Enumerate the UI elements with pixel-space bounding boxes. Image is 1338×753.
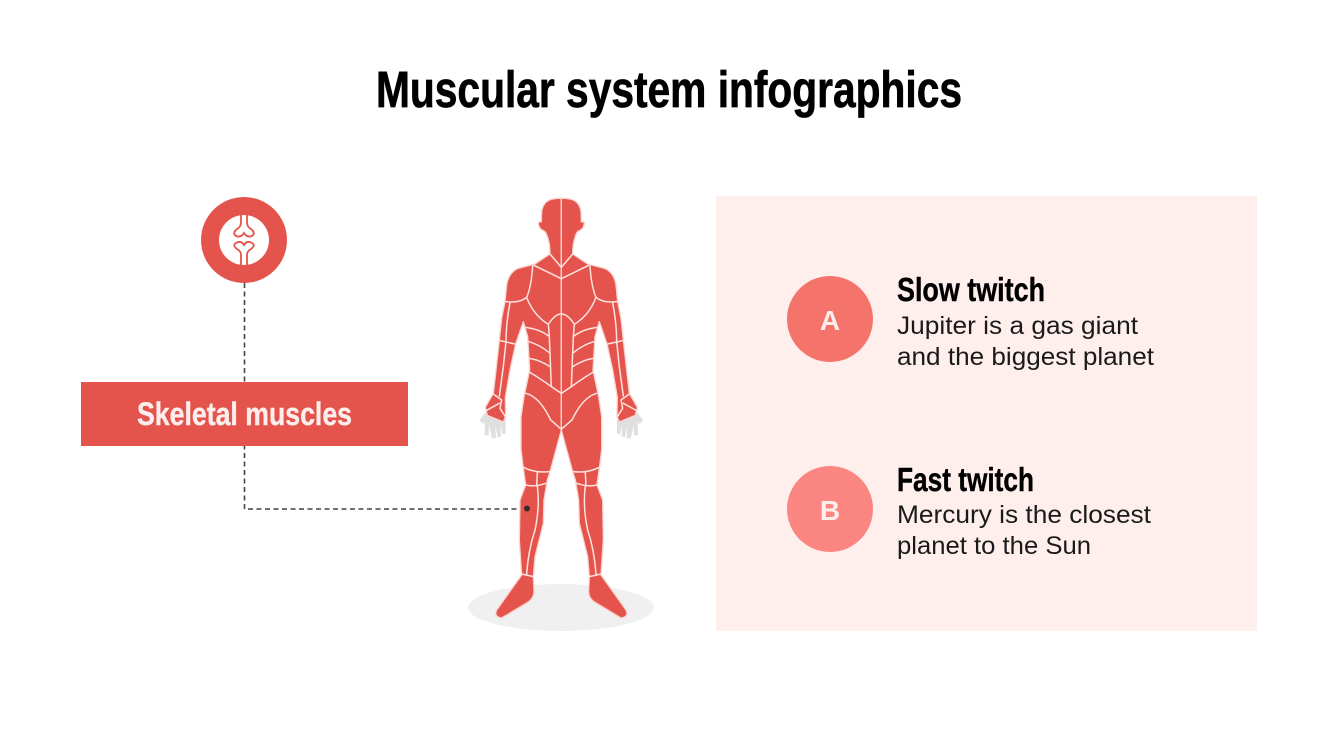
icon: joint [201,197,287,283]
item: fast twitch: B [820,495,840,526]
human muscular figure [479,198,643,618]
item: slow twitch [787,271,1154,371]
item: slow twitch: and the biggest planet [897,343,1154,371]
ground shadow [468,584,654,631]
title: Muscular system infographics [376,61,962,118]
item: fast twitch: planet to the Sun [897,532,1091,560]
item: slow twitch: Slow twitch [897,271,1045,308]
marker dot [524,506,530,512]
item: slow twitch: A [820,305,840,336]
label: skeletal muscles: Skeletal muscles [137,396,352,432]
item: fast twitch: Mercury is the closest [897,501,1151,529]
connector line [244,283,525,509]
item: slow twitch: Jupiter is a gas giant [897,312,1138,340]
label: skeletal muscles [81,382,408,446]
item: fast twitch: Fast twitch [897,461,1034,498]
item: fast twitch [787,461,1151,560]
panel: muscle fibre types [716,196,1257,631]
